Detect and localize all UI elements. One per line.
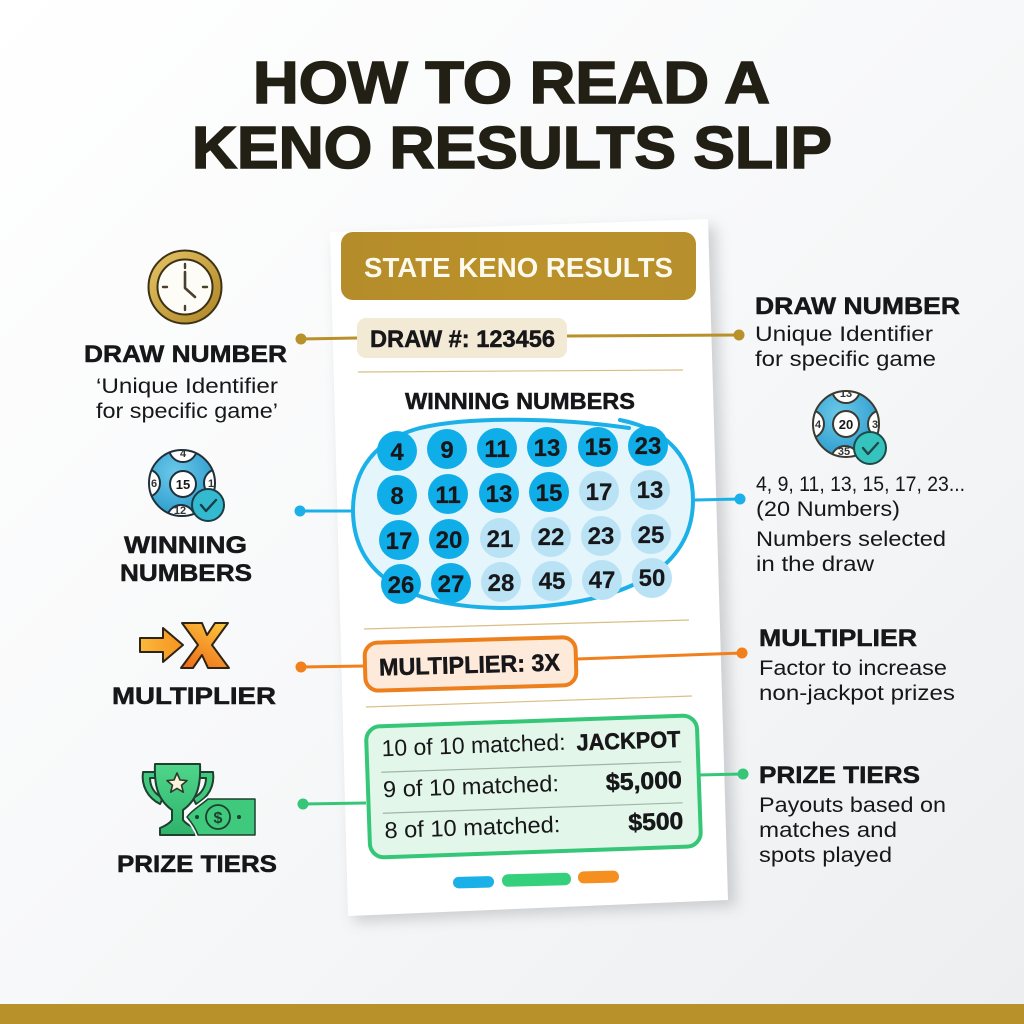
connector: winning numbers left <box>294 506 353 516</box>
connector: multiplier left <box>296 662 365 672</box>
prize tiers table <box>366 715 701 858</box>
winning numbers heading: WINNING NUMBERS <box>405 388 635 414</box>
number balls: 17 <box>386 528 412 555</box>
right label: winning numbers: in the draw <box>756 553 875 576</box>
left label: multiplier: MULTIPLIER <box>112 683 276 710</box>
right label: prize tiers: Payouts based on <box>759 794 946 817</box>
number balls: 13 <box>534 435 560 462</box>
prize row: 500 <box>384 807 684 845</box>
prize row: 5000 <box>383 766 682 804</box>
right label: draw number: DRAW NUMBER <box>755 293 960 320</box>
left label: draw number <box>84 341 287 423</box>
icon: lottery ball 15: 1 <box>208 478 214 490</box>
icon: lottery ball 15: 15 <box>176 477 190 492</box>
number balls: 22 <box>538 524 564 551</box>
number balls: 15 <box>585 434 611 461</box>
title: KENO RESULTS SLIP <box>192 115 832 181</box>
number balls: 27 <box>438 571 464 598</box>
icon: lottery ball 20 <box>812 390 887 465</box>
draw number pill: DRAW #: 123456 <box>370 326 555 353</box>
number balls: 15 <box>536 480 562 507</box>
right label: prize tiers: PRIZE TIERS <box>759 762 920 789</box>
connector: winning numbers right <box>695 494 746 504</box>
slip header: STATE KENO RESULTS <box>364 252 673 283</box>
number balls: 26 <box>388 572 414 599</box>
connector: prize tiers right <box>698 768 748 780</box>
number balls: 21 <box>487 526 513 553</box>
right label: winning numbers <box>756 473 965 576</box>
icon: trophy and banknote <box>143 764 255 835</box>
right label: draw number: Unique Identifier <box>755 323 933 346</box>
icon: lottery ball 20: 4 <box>815 419 822 431</box>
colour footer bars <box>453 870 619 889</box>
right label: draw number: for specific game <box>755 348 936 371</box>
number balls: 23 <box>588 523 614 550</box>
right label: multiplier: Factor to increase <box>759 657 947 680</box>
left label: winning numbers: WINNING <box>124 532 247 559</box>
bottom gold bar <box>0 1004 1024 1024</box>
right label: multiplier <box>759 625 955 705</box>
right label: draw number <box>755 293 960 371</box>
title: HOW TO READ A <box>253 50 770 116</box>
number balls: 4 <box>390 439 404 466</box>
prize row: jackpot: 10 of 10 matched: <box>381 729 566 761</box>
draw number pill <box>357 318 567 358</box>
left label: draw number: for specific game’ <box>96 400 278 423</box>
left label: draw number: ‘Unique Identifier <box>96 375 278 398</box>
winning numbers outline <box>353 420 693 608</box>
icon: lottery ball 15: 6 <box>151 478 157 490</box>
multiplier pill: MULTIPLIER: 3X <box>379 649 560 682</box>
number balls: 13 <box>486 481 512 508</box>
icon: lottery ball 15: 12 <box>174 505 186 517</box>
icon: multiplier arrow and x <box>140 623 229 668</box>
number balls: 50 <box>639 565 665 592</box>
right label: prize tiers <box>759 762 946 867</box>
left label: draw number: DRAW NUMBER <box>84 341 287 368</box>
prize row: 5000: 9 of 10 matched: <box>383 770 559 802</box>
prize row: 5000: $5,000 <box>605 767 682 796</box>
right label: prize tiers: spots played <box>759 844 892 867</box>
number balls: 11 <box>484 436 510 463</box>
number balls: 17 <box>586 479 612 506</box>
prize row: 500: $500 <box>628 808 684 837</box>
connector: draw number right <box>567 330 744 340</box>
slip header <box>341 232 696 300</box>
prize row: jackpot: JACKPOT <box>576 726 681 755</box>
connector: draw number left <box>296 334 357 344</box>
number balls <box>377 426 672 604</box>
right label: multiplier: non-jackpot prizes <box>759 682 955 705</box>
icon: lottery ball 20: 3 <box>872 419 878 431</box>
number balls: 47 <box>589 567 615 594</box>
icon: lottery ball 15 <box>148 449 225 522</box>
panel: results slip <box>330 219 736 922</box>
icon: trophy and banknote: $ <box>214 810 223 827</box>
left label: winning numbers: NUMBERS <box>120 560 252 587</box>
multiplier pill <box>364 637 577 691</box>
right label: winning numbers: 4, 9, 11, 13, 15, 17, 23... <box>756 473 965 496</box>
icon: lottery ball 20: 35 <box>838 446 850 458</box>
prize row: 500: 8 of 10 matched: <box>384 811 561 843</box>
connector: multiplier right <box>577 648 748 659</box>
right label: multiplier: MULTIPLIER <box>759 625 917 652</box>
icon: clock <box>148 250 222 324</box>
number balls: 9 <box>440 437 454 464</box>
number balls: 8 <box>390 483 404 510</box>
number balls: 25 <box>638 522 664 549</box>
right label: prize tiers: matches and <box>759 819 897 842</box>
number balls: 45 <box>539 568 565 595</box>
number balls: 28 <box>488 570 514 597</box>
left label: prize tiers: PRIZE TIERS <box>117 851 277 878</box>
icon: lottery ball 15: 4 <box>180 448 187 460</box>
prize row: jackpot <box>381 725 681 762</box>
connector: prize tiers left <box>298 798 366 810</box>
left label: winning numbers <box>120 532 252 587</box>
icon: lottery ball 20: 13 <box>840 388 852 400</box>
icon: lottery ball 20: 20 <box>839 417 853 432</box>
number balls: 11 <box>435 482 461 509</box>
title <box>192 50 832 181</box>
right label: winning numbers: Numbers selected <box>756 528 946 551</box>
number balls: 20 <box>436 527 462 554</box>
right label: winning numbers: (20 Numbers) <box>756 498 900 521</box>
number balls: 13 <box>637 477 663 504</box>
number balls: 23 <box>635 433 661 460</box>
